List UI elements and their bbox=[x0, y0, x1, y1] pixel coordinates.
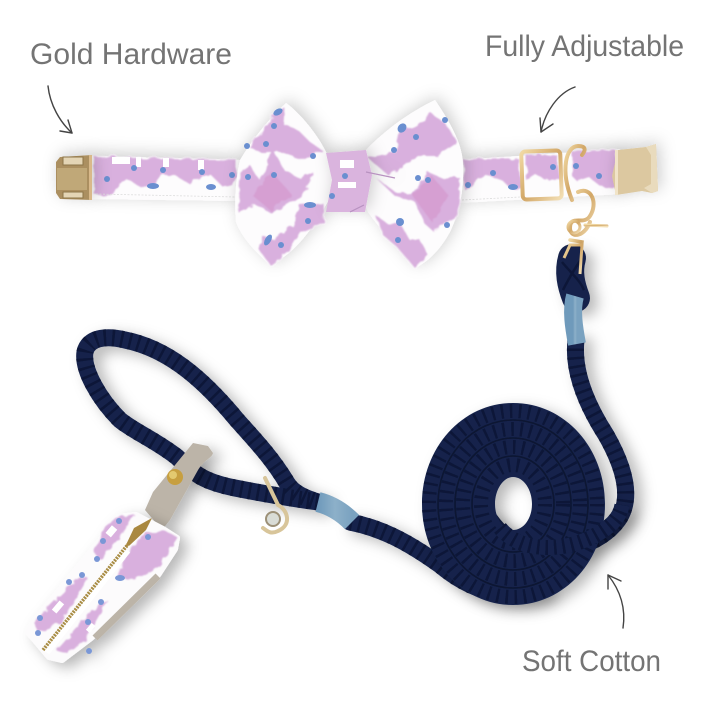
gold snap base bbox=[564, 245, 582, 274]
blue thread wrap: lower bbox=[318, 502, 352, 522]
rope coil bbox=[422, 403, 622, 605]
d-ring and swivel hook bbox=[565, 146, 607, 272]
bow bbox=[235, 100, 463, 268]
arrow: soft cotton bbox=[608, 575, 624, 628]
zipper bbox=[46, 550, 127, 652]
pouch body bbox=[28, 514, 178, 660]
leather strap bbox=[145, 443, 213, 530]
left gold clasp bbox=[56, 155, 92, 200]
left collar strap bbox=[90, 156, 240, 201]
heading: Soft Cotton: Soft Cotton bbox=[522, 645, 661, 678]
rope: long section and outer run bbox=[350, 340, 626, 594]
small gold charm bbox=[263, 478, 287, 533]
leash bbox=[85, 245, 626, 605]
bow wings bbox=[235, 100, 463, 268]
heading: Fully Adjustable: Fully Adjustable bbox=[485, 30, 684, 63]
blue thread wrap: top bbox=[573, 296, 577, 344]
arrow: fully adjustable bbox=[540, 87, 575, 132]
heading: Gold Hardware: Gold Hardware bbox=[30, 38, 232, 71]
right gold buckle bbox=[612, 144, 658, 195]
bow knot bbox=[326, 150, 395, 212]
waste bag holder bbox=[28, 443, 213, 660]
slider frame bbox=[521, 150, 562, 200]
collar bbox=[56, 144, 658, 272]
wing watercolor pattern bbox=[238, 108, 460, 268]
rope: top section bbox=[562, 258, 584, 298]
rope: handle loop bbox=[85, 338, 318, 502]
right collar strap bbox=[460, 149, 622, 203]
arrow: gold hardware bbox=[48, 86, 72, 133]
